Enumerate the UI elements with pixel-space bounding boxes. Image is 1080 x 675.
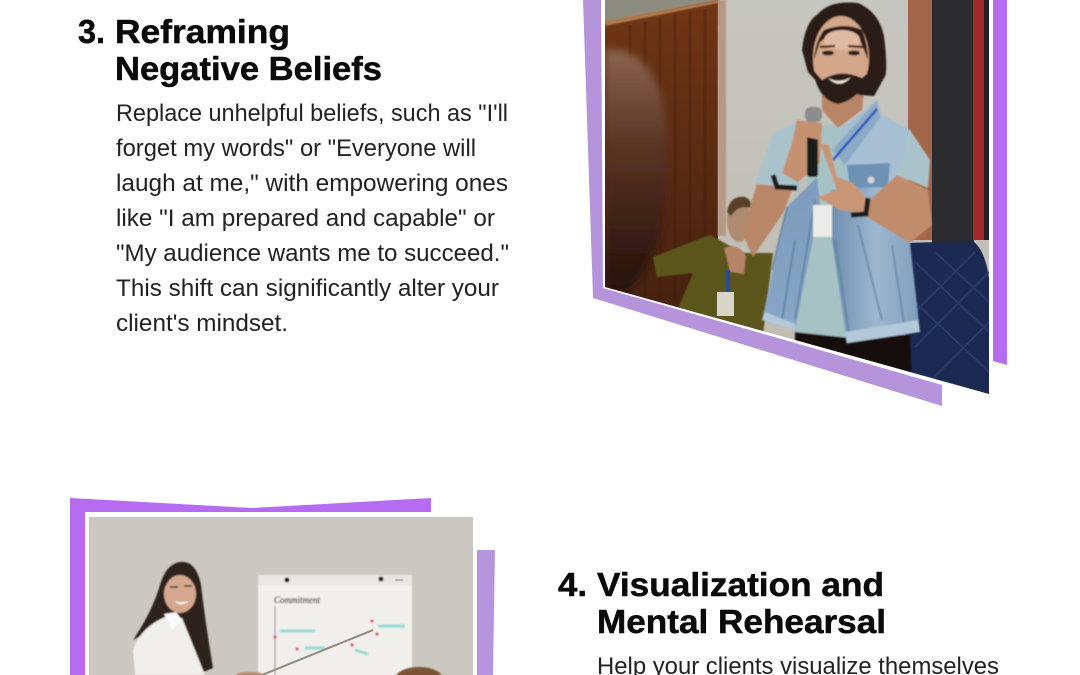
heading: 4. Visualization and Mental Rehearsal: Visualization and (597, 566, 884, 603)
left arm (742, 184, 793, 257)
heading: 3. Reframing Negative Beliefs: Reframing (115, 13, 290, 50)
hand (236, 672, 264, 675)
heading: 3. Reframing Negative Beliefs: 3. (78, 13, 105, 50)
head (802, 2, 886, 128)
frame: lavender right strip (477, 550, 495, 675)
seated person (726, 206, 750, 243)
heading: 3. Reframing Negative Beliefs: Negative Beliefs (115, 50, 382, 87)
frame: purple right strip (993, 0, 1007, 365)
watches (773, 175, 797, 188)
right arm (867, 175, 932, 243)
man body (742, 100, 932, 394)
heading: 4. Visualization and Mental Rehearsal (558, 566, 886, 640)
foreground head (395, 667, 443, 675)
hand holding microphone (782, 120, 822, 182)
photo: woman pointing at whiteboard (89, 517, 473, 675)
chart sketch: Commitment (274, 595, 320, 605)
heading: 3. Reframing Negative Beliefs (78, 13, 382, 87)
microphone (807, 127, 818, 177)
vest right front (832, 185, 920, 343)
panel: photo of woman at whiteboard with frame (70, 498, 495, 675)
frame: purple top and left strip (70, 498, 431, 675)
navy chair (905, 241, 989, 394)
text block: reframing description: like "I am prepared and capable" or (116, 205, 495, 232)
panel: photo of man speaking with frame (583, 0, 1007, 406)
vest left front (762, 177, 820, 330)
heading: 4. Visualization and Mental Rehearsal: Mental Rehearsal (597, 603, 886, 640)
pointer (262, 630, 373, 675)
photo: speaker with microphone (605, 0, 989, 394)
chart sketch (274, 595, 405, 675)
text block: reframing description: "My audience wants me to succeed." (116, 240, 509, 267)
badge (813, 205, 832, 237)
tee (795, 125, 850, 338)
blurred foreground head (605, 50, 668, 292)
wood panel (605, 0, 718, 330)
text block: reframing description: client's mindset. (116, 310, 288, 337)
text block: reframing description: Replace unhelpful beliefs, such as "I'll (116, 100, 508, 127)
heading: 4. Visualization and Mental Rehearsal: 4. (558, 566, 587, 603)
text block: reframing description: laugh at me," with empowering ones (116, 170, 508, 197)
vest yoke right (840, 102, 910, 183)
upper-left grey wall above wood (605, 0, 720, 25)
whiteboard (258, 575, 412, 675)
lanyard (833, 109, 877, 160)
woman (133, 562, 213, 675)
chest pocket (847, 163, 890, 188)
text block: reframing description (116, 100, 509, 337)
trousers (794, 330, 912, 372)
text block: reframing description: forget my words" or "Everyone will (116, 135, 476, 162)
shirt sleeves (755, 120, 803, 190)
frame: lavender left and bottom strip (583, 0, 942, 406)
text block: reframing description: This shift can significantly alter your (116, 275, 499, 302)
pointing hand (817, 143, 868, 213)
collar (832, 100, 880, 165)
